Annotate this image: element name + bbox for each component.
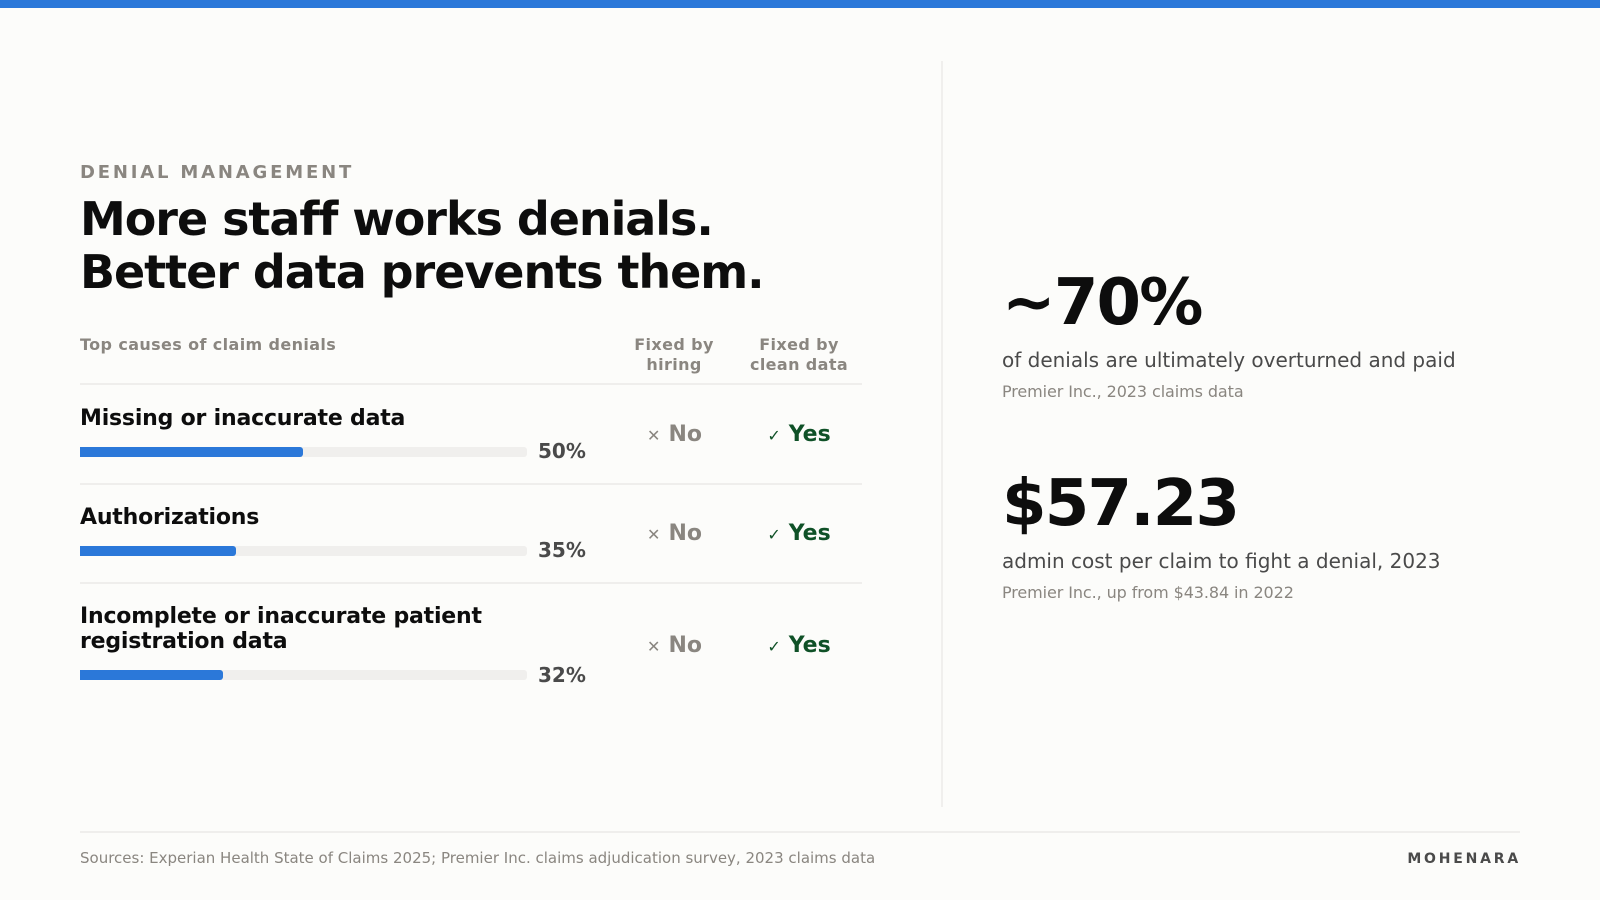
stat description: admin cost per claim to fight a denial, 2023 [1002,549,1441,573]
row: incomplete or inaccurate patient registration data [80,604,831,687]
table header: fixed by hiring [634,335,714,374]
table header: fixed by clean data: Fixed by [759,335,839,354]
no marker: ✕ No [647,422,702,447]
title: More staff works denials. [80,192,713,246]
stat description: of denials are ultimately overturned and paid [1002,348,1456,372]
eyebrow label: DENIAL MANAGEMENT [80,162,354,183]
stat source: Premier Inc., up from $43.84 in 2022 [1002,583,1294,602]
title [80,192,764,299]
row label [80,604,482,654]
stat source: Premier Inc., 2023 claims data [1002,382,1244,401]
bar: 50% [80,447,527,457]
value: 32% [538,663,586,687]
yes marker: ✓ Yes [767,633,831,658]
row label: Incomplete or inaccurate patient [80,604,482,629]
value: 35% [538,538,586,562]
panel: left column [80,162,862,687]
bar: 32% [80,670,527,680]
table header: fixed by clean data: clean data [750,355,848,374]
table header: fixed by clean data [750,335,848,374]
table header: fixed by hiring: Fixed by [634,335,714,354]
no marker: ✕ No [647,521,702,546]
footer brand: MOHENARA [1407,851,1521,867]
bar: 35% [80,546,527,556]
row label: Missing or inaccurate data [80,406,405,431]
row: missing or inaccurate data [80,406,831,463]
stat number: $57.23 [1002,467,1238,541]
stat number: ~70% [1002,266,1202,340]
footer sources: Sources: Experian Health State of Claims 2025; Premier Inc. claims adjudication survey, 2023 claims data [80,849,875,867]
table header: causes: Top causes of claim denials [80,335,336,354]
row label: Authorizations [80,505,259,530]
yes marker: ✓ Yes [767,422,831,447]
row label: registration data [80,629,287,654]
top accent bar [0,0,1600,8]
table header: fixed by hiring: hiring [646,355,702,374]
stat: $57.23 admin cost [1002,467,1441,602]
row: authorizations [80,505,831,562]
no marker: ✕ No [647,633,702,658]
value: 50% [538,439,586,463]
stat: ~70% overturned [1002,266,1456,401]
title: Better data prevents them. [80,245,764,299]
yes marker: ✓ Yes [767,521,831,546]
